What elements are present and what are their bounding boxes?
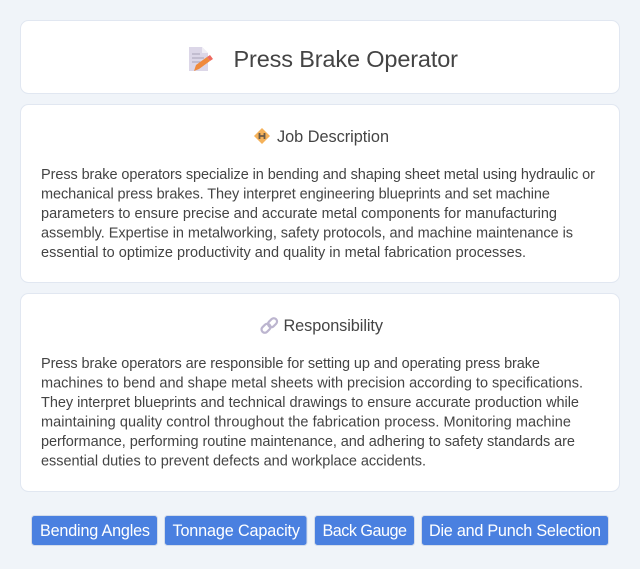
text: job description body: essential to optimize productivity and quality in metal fabrication processes. — [41, 245, 526, 261]
tag: tonnage capacity — [164, 516, 307, 546]
text: responsibility body — [41, 356, 583, 470]
tag: back gauge: Back Gauge — [322, 522, 407, 540]
heading: job description: Job Description — [277, 128, 389, 146]
icon: chain link — [260, 317, 278, 334]
icon: document with pencil — [189, 47, 213, 71]
text: job description body — [41, 167, 595, 261]
text: job description body: Press brake operators specialize in bending and shaping sheet metal using hydraulic or — [41, 167, 595, 183]
tag: tonnage capacity: Tonnage Capacity — [172, 522, 301, 540]
text: job description body: parameters to ensure precise and accurate metal components for manufacturing — [41, 206, 557, 222]
panel: responsibility — [20, 294, 620, 492]
text: job description body: assembly. Expertise in metalworking, safety protocols, and machine maintenance is — [41, 226, 573, 242]
text: responsibility body: Press brake operators are responsible for setting up and operating press brake — [41, 356, 540, 372]
icon: road sign diamond — [254, 128, 270, 144]
heading: responsibility: Responsibility — [284, 317, 384, 335]
text: responsibility body: essential duties to prevent defects and workplace accidents. — [41, 454, 426, 470]
text: responsibility body: They interpret blueprints and technical drawings to ensure accurate production while — [41, 395, 579, 411]
tags row — [32, 516, 608, 546]
tag: die and punch selection — [422, 516, 608, 546]
text: responsibility body: machines to bend and shape metal sheets with precision according to specifications. — [41, 376, 583, 392]
tag: bending angles: Bending Angles — [40, 522, 150, 540]
tag: back gauge — [314, 516, 414, 546]
text: responsibility body: maintaining quality control throughout the fabrication process. Monitoring machine — [41, 414, 571, 430]
text: responsibility body: performance, performing routine maintenance, and adhering to safety standards are — [41, 434, 575, 450]
tag: bending angles — [32, 516, 158, 546]
text: job description body: mechanical press brakes. They interpret engineering blueprints and set machine — [41, 186, 550, 202]
heading: page title: Press Brake Operator — [234, 46, 458, 72]
panel: title — [20, 20, 620, 94]
tag: die and punch selection: Die and Punch Selection — [429, 522, 601, 540]
panel: job description — [20, 104, 620, 282]
